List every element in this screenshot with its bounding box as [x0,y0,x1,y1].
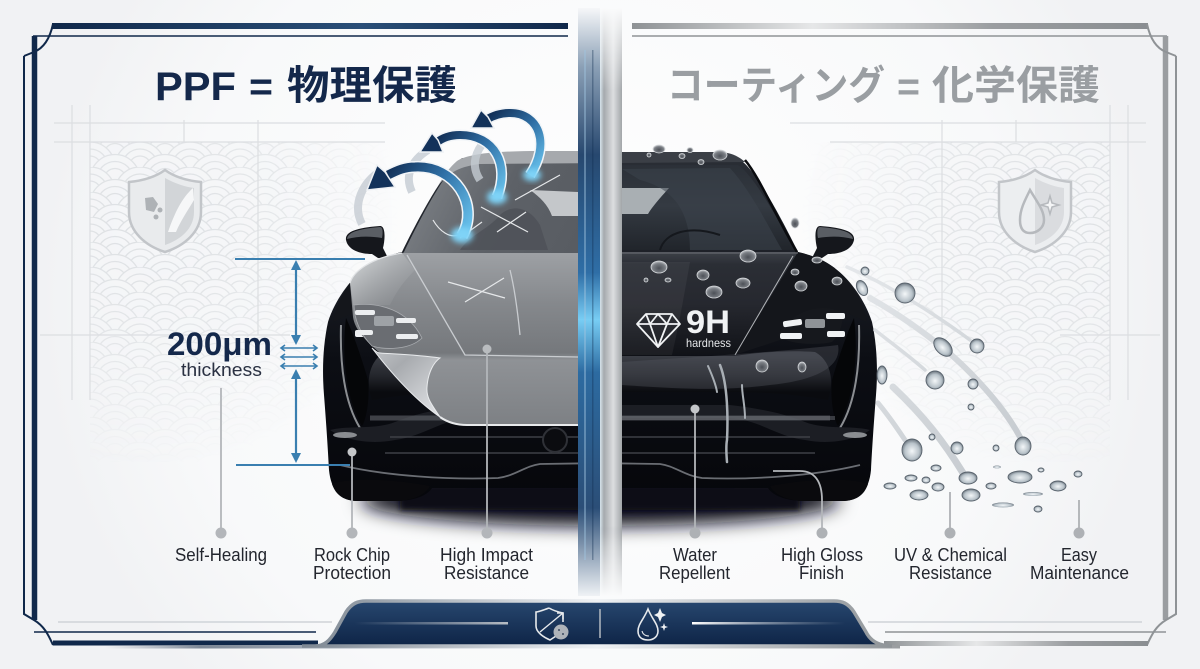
arrow 2 [420,133,507,204]
thickness dimension arrows [235,259,365,465]
9H value: 9H [686,304,730,340]
feature: Easy Maintenance: Maintenance [1030,563,1129,583]
windshield film [404,158,578,253]
feature: Water Repellent [659,404,730,583]
bottom badge bar [105,601,900,648]
roof [438,151,578,186]
divider [599,609,601,638]
impact arrows [358,110,541,243]
hood panel sheen [622,262,690,355]
water streams [847,267,1020,473]
feature: Water Repellent: Repellent [659,563,730,583]
feature: High Impact Resistance: Resistance [444,563,529,583]
frame: coating silver border [632,23,1176,646]
title: PPF: 物理保護 [287,64,457,108]
hood film [350,253,578,424]
underline [105,645,900,648]
arrow 3 [471,110,541,181]
feature: UV and Chemical Resistance: Resistance [909,563,992,583]
feature: UV and Chemical Resistance [894,492,1007,583]
blue side [578,8,600,596]
icon: shield with rock [536,608,568,640]
car ground shadow [360,474,840,526]
windshield reflection [622,188,669,214]
icon: water drop shield [999,170,1071,252]
feature: Rock Chip Protection: Protection [313,563,391,583]
feature: High Gloss Finish [773,471,863,583]
icon: rock chip shield [129,170,201,252]
peeled film corner [372,348,440,417]
water droplets off the car [854,267,1082,512]
feature: Rock Chip Protection: Rock Chip [314,545,390,565]
feature: High Impact Resistance: High Impact [440,545,533,565]
hardness caption: hardness [686,336,731,350]
center divider [578,8,622,596]
icon: drop with sparkles [638,608,668,640]
bumper sheen [622,345,838,389]
feature: Rock Chip Protection [313,448,391,583]
headlight under film [354,304,422,348]
panel: coating blueprint backdrop [790,105,1160,418]
panel: PPF blueprint backdrop [40,105,385,420]
title: PPF: PPF [155,65,236,109]
feature: High Gloss Finish: Finish [799,563,844,583]
feature: UV and Chemical Resistance: UV & Chemical [894,545,1007,565]
feature: Easy Maintenance: Easy [1061,545,1097,565]
title: PPF: = [249,65,273,109]
feature: High Gloss Finish: High Gloss [781,545,863,565]
feature: Self-Healing: Self-Healing [175,545,267,565]
value: 200μm [167,326,272,362]
title: PPF [155,64,457,109]
sensor [543,428,567,452]
200 micron callout [167,326,272,380]
caption: thickness [181,360,262,380]
ghost arcs [358,140,486,224]
car: PPF half with film [323,151,605,501]
feature: Easy Maintenance [1030,500,1129,583]
title: coating: = [897,65,920,109]
title: coating [667,64,1100,109]
title: coating: 化学保護 [932,64,1100,108]
feature: Self-Healing [175,388,267,565]
film lines [350,253,578,425]
water droplets on the car [644,145,842,372]
feature: High Impact Resistance [440,344,533,583]
feature: Water Repellent: Water [673,545,717,565]
car: coating half [595,152,877,501]
frame: PPF navy border [24,23,568,645]
silver side [600,8,622,596]
bar shape [302,601,892,646]
arrow 1 [367,165,473,243]
title: coating: コーティング [667,64,885,108]
scratches [433,175,560,302]
icon: diamond [637,314,680,347]
water runs on bumper [708,365,745,462]
9H hardness badge [637,304,731,350]
